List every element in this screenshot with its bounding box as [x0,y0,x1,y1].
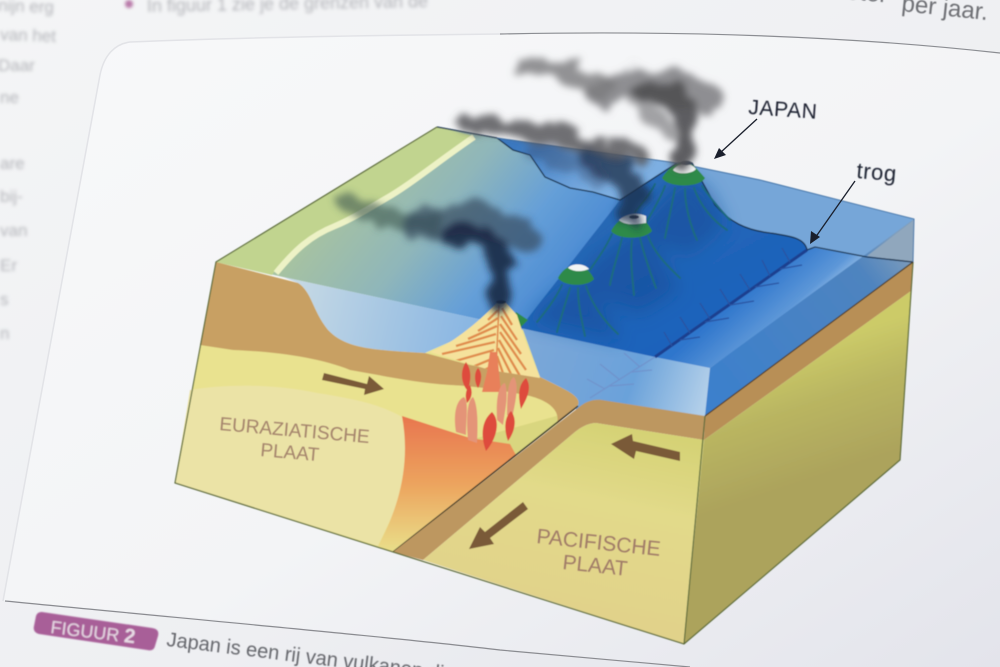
pacific plate front [423,423,704,644]
pale plumes [455,377,517,443]
blurred body text above and beside the figure [0,0,428,343]
right brown crust [704,262,913,440]
eurasian plate base [175,262,579,552]
label: Euraziatische plaat: EURAZIATISCHE [219,414,370,448]
caption badge: FIGUUR 2 [49,616,137,648]
arrow: eurasian plate motion [322,373,384,395]
arrow: pacific plate motion [611,434,680,461]
smoke from japan volcano [525,68,705,155]
red drops [462,362,529,451]
trench bristles [587,248,802,398]
streaks on volcano C [537,285,618,336]
brown eurasian crust [200,262,579,424]
magma drops [455,362,529,451]
striped volcano cone [430,300,540,392]
volcanic ridge [520,163,807,357]
grey water corner [867,220,914,262]
back sea basin [497,138,677,200]
back water surface [677,163,914,265]
top right body text [789,0,989,26]
volcano C cap [558,264,594,285]
pale road strip [276,137,474,273]
label: Pacifische plaat: PLAAT [561,551,629,581]
blurred body text above and beside the figure: ne [0,88,19,107]
front water section [283,277,520,353]
arrow: trog pointer [810,181,855,244]
green yellow wedge [470,415,560,455]
blurred body text above and beside the figure: van het [0,25,57,46]
magma chamber [378,416,516,552]
blurred body text above and beside the figure: s [0,290,8,309]
right water face [705,219,914,416]
arrow: JAPAN pointer [714,119,757,159]
arrow: subduction direction [469,502,528,549]
water surface edge [497,138,914,262]
bright ocean floor band [655,248,867,368]
caption badge [34,612,158,650]
smoke from front volcano [345,203,525,298]
label: Euraziatische plaat [219,414,370,466]
block diagram [175,127,914,644]
volcano A cap [662,161,705,186]
smoke from middle volcano [462,123,640,212]
green coastal land [216,127,474,275]
pacific plate brown crust [393,400,705,560]
blurred body text above and beside the figure: van [0,221,27,240]
label: Euraziatische plaat: PLAAT [260,440,320,466]
magma conduit [482,352,501,392]
right olive face [684,291,911,644]
volcano D cap [512,312,528,328]
blurred body text above and beside the figure: bij- [0,187,23,206]
label: Pacifische plaat: PACIFISCHE [535,525,662,561]
plate boundary line [393,406,578,552]
dark volcano slopes [530,175,725,340]
sea floor profile line [437,127,913,262]
label: JAPAN: JAPAN [748,96,818,124]
label: Pacifische plaat [535,525,662,581]
streaks on volcano B [590,234,680,295]
block outlines [175,127,913,644]
blurred body text above and beside the figure: Er [0,256,17,275]
smoke plumes [345,68,705,298]
sea floor and land surface [216,127,640,328]
streaks on volcano A [635,184,730,240]
blurred body text above and beside the figure: n [0,324,9,343]
trench line [655,250,807,357]
blurred body text above and beside the figure: are [0,154,25,173]
pale inner plate [175,386,410,546]
label: trog: trog [856,158,898,186]
front water section right [520,328,710,418]
volcano B cap [611,214,652,238]
